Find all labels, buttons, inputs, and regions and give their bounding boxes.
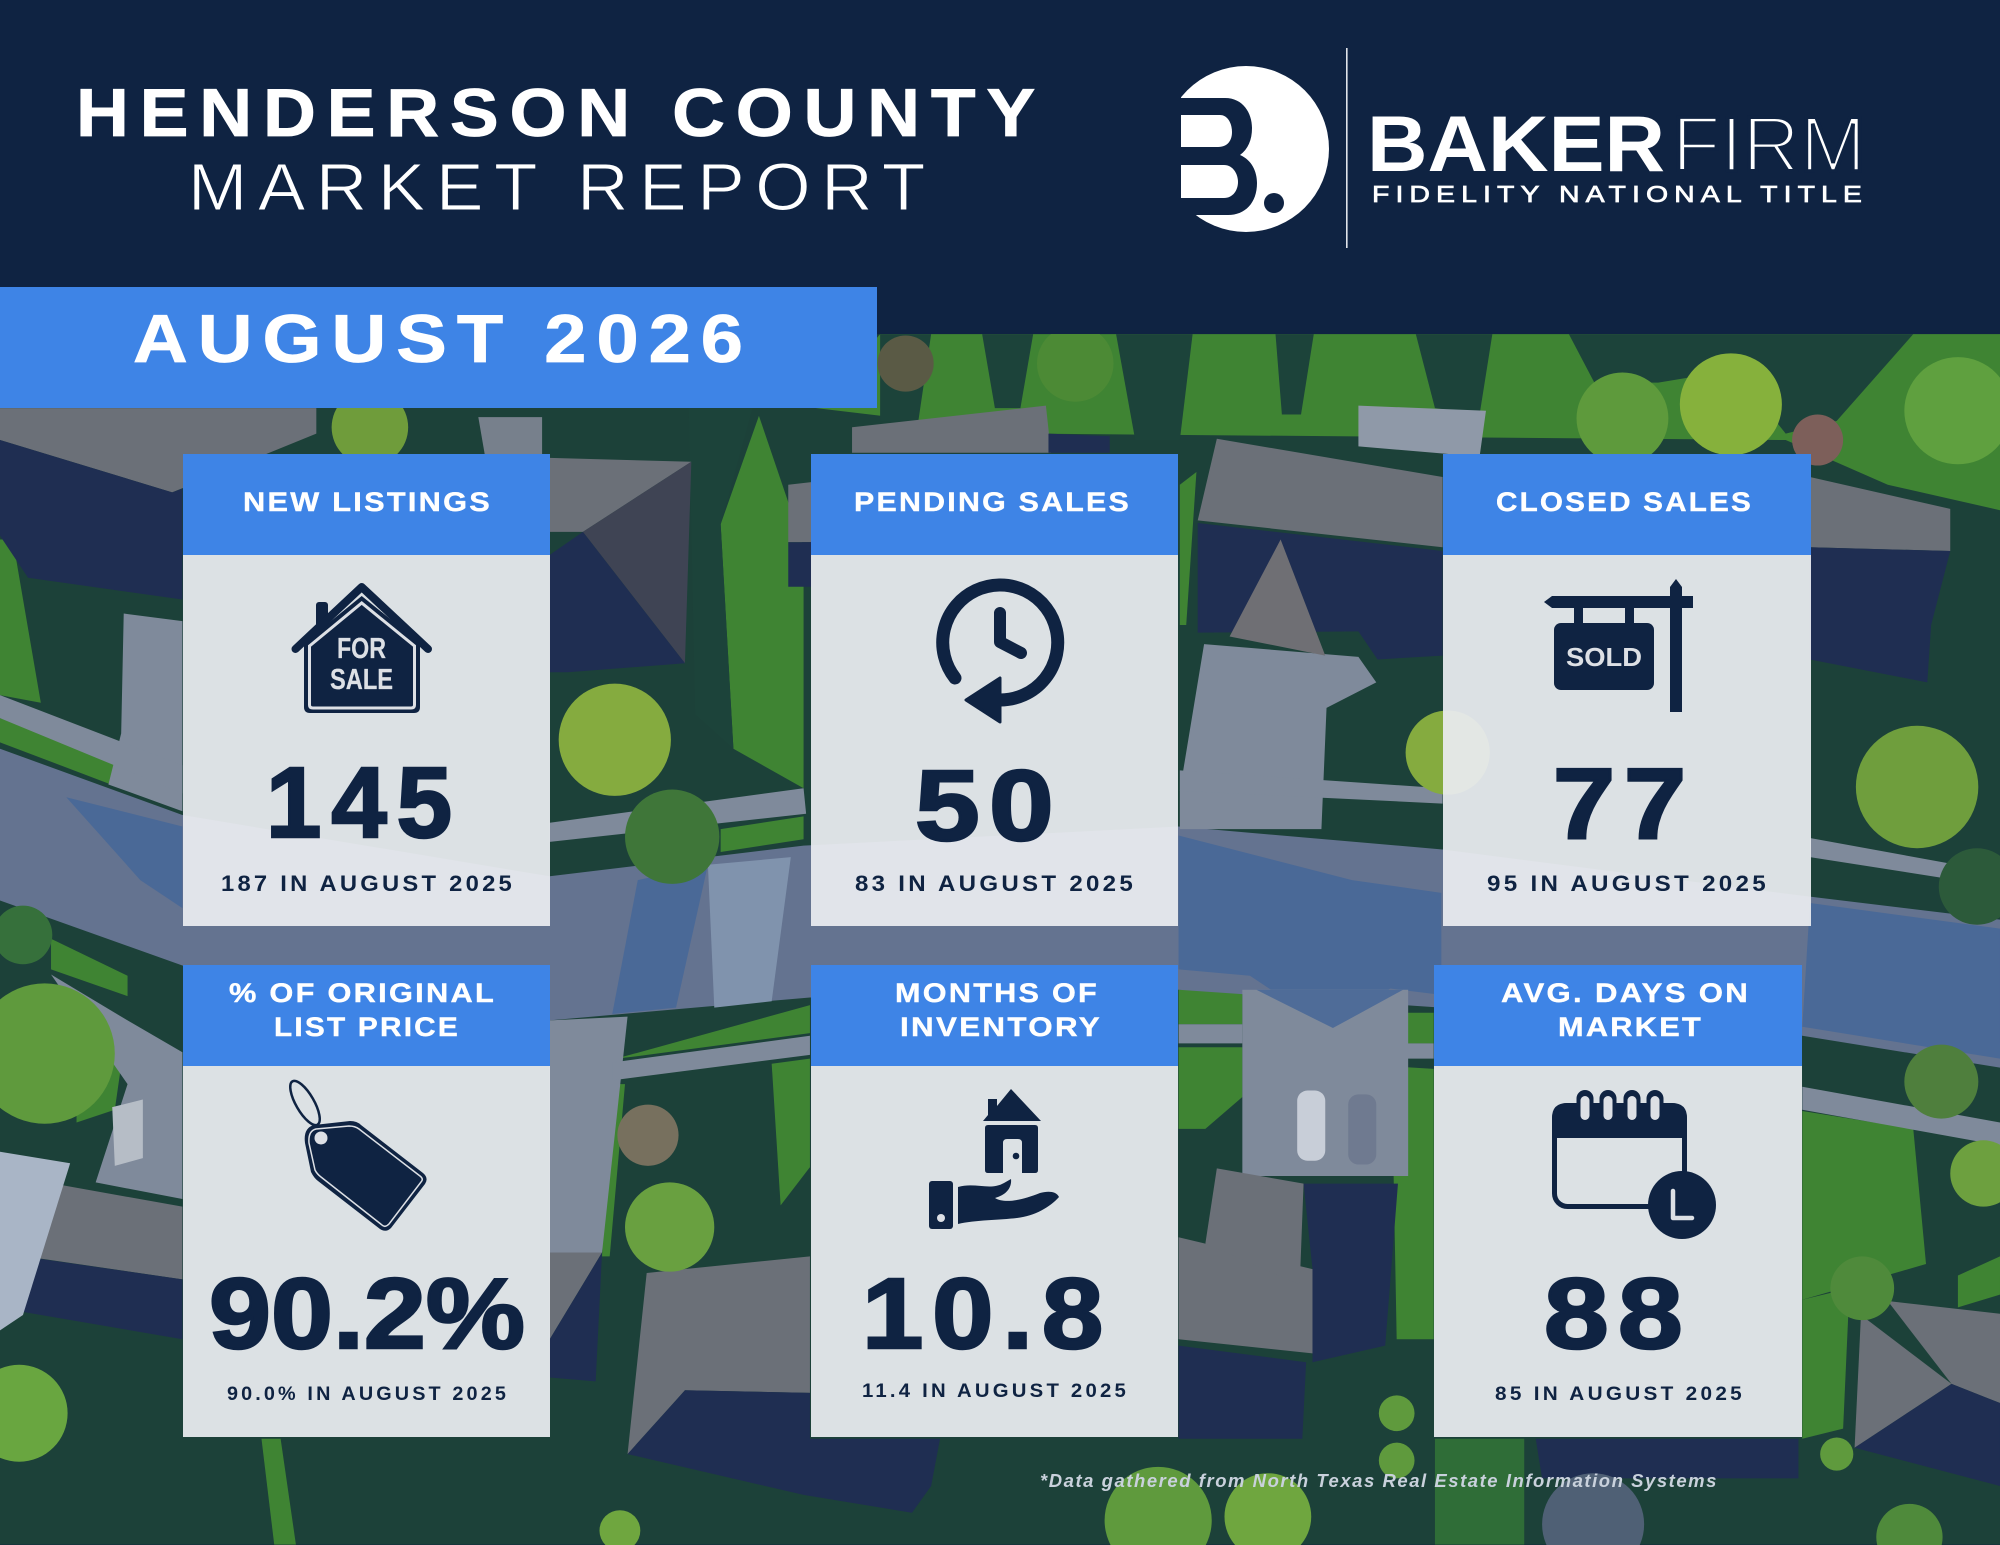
- icon: for sale house: FOR: [337, 633, 386, 665]
- icon: for sale house: SALE: [330, 664, 393, 696]
- date banner: [0, 287, 877, 408]
- trees: [0, 325, 2000, 1545]
- panel: pending sales: PENDING SALES: [854, 487, 1131, 517]
- panel: percent of original list price: 90.0% IN AUGUST 2025: [227, 1384, 509, 1405]
- houses: [0, 406, 2000, 1454]
- title: HENDERSON COUNTY: [76, 75, 1046, 151]
- panel: months of inventory: INVENTORY: [900, 1012, 1102, 1042]
- road: [0, 749, 2000, 1068]
- logo: Baker Firm: BAKER: [1367, 99, 1665, 188]
- driveways: [108, 614, 182, 811]
- background: aerial neighborhood photo: [0, 325, 2000, 1545]
- panel: new listings: [183, 454, 550, 926]
- panel: pending sales: 83 IN AUGUST 2025: [855, 871, 1136, 896]
- panel: new listings: NEW LISTINGS: [243, 487, 492, 517]
- footnote: *Data gathered from North Texas Real Estate Information Systems: [1040, 1471, 1718, 1491]
- logo: Baker Firm: FIDELITY NATIONAL TITLE: [1372, 181, 1868, 207]
- panel: percent of original list price: % OF ORIGINAL: [229, 978, 496, 1008]
- icon: hand holding house: [929, 1089, 1059, 1229]
- panel: avg days on market: 85 IN AUGUST 2025: [1495, 1384, 1745, 1405]
- logo: Baker Firm: [1160, 48, 1868, 248]
- title: [76, 75, 1046, 225]
- title: MARKET REPORT: [188, 150, 936, 225]
- panel: avg days on market: [1434, 965, 1802, 1437]
- icon: price tag: [285, 1077, 427, 1231]
- icon: sold sign: [1544, 579, 1693, 712]
- panel: avg days on market: 88: [1544, 1258, 1692, 1370]
- icon: sold sign: SOLD: [1566, 642, 1642, 672]
- panel: months of inventory: 11.4 IN AUGUST 2025: [862, 1381, 1129, 1402]
- panel: avg days on market: AVG. DAYS ON: [1501, 978, 1750, 1008]
- panel: closed sales: 77: [1553, 748, 1695, 860]
- icon: for sale house: [296, 587, 428, 713]
- icon: calendar with clock: [1552, 1090, 1716, 1239]
- icon: B. roundel: [1160, 60, 1329, 240]
- panel: months of inventory: MONTHS OF: [895, 978, 1099, 1008]
- panel: months of inventory: [811, 965, 1178, 1437]
- panel: months of inventory: 10.8: [862, 1258, 1112, 1370]
- panel: pending sales: 50: [915, 750, 1063, 862]
- icon: clock with return arrow: [943, 585, 1058, 722]
- panel: pending sales: [811, 454, 1178, 926]
- panel: percent of original list price: [183, 965, 550, 1437]
- date banner: AUGUST 2026: [133, 301, 753, 377]
- panel: new listings: 145: [266, 747, 462, 859]
- panel: avg days on market: MARKET: [1558, 1012, 1703, 1042]
- logo: Baker Firm: FIRM: [1672, 100, 1866, 188]
- panel: closed sales: [1443, 454, 1811, 926]
- panel: new listings: 187 IN AUGUST 2025: [221, 871, 515, 896]
- panel: closed sales: CLOSED SALES: [1496, 487, 1753, 517]
- panel: percent of original list price: 90.2%: [209, 1258, 525, 1370]
- panel: percent of original list price: LIST PRICE: [274, 1012, 460, 1042]
- header band: [0, 0, 2000, 334]
- panel: closed sales: 95 IN AUGUST 2025: [1487, 871, 1769, 896]
